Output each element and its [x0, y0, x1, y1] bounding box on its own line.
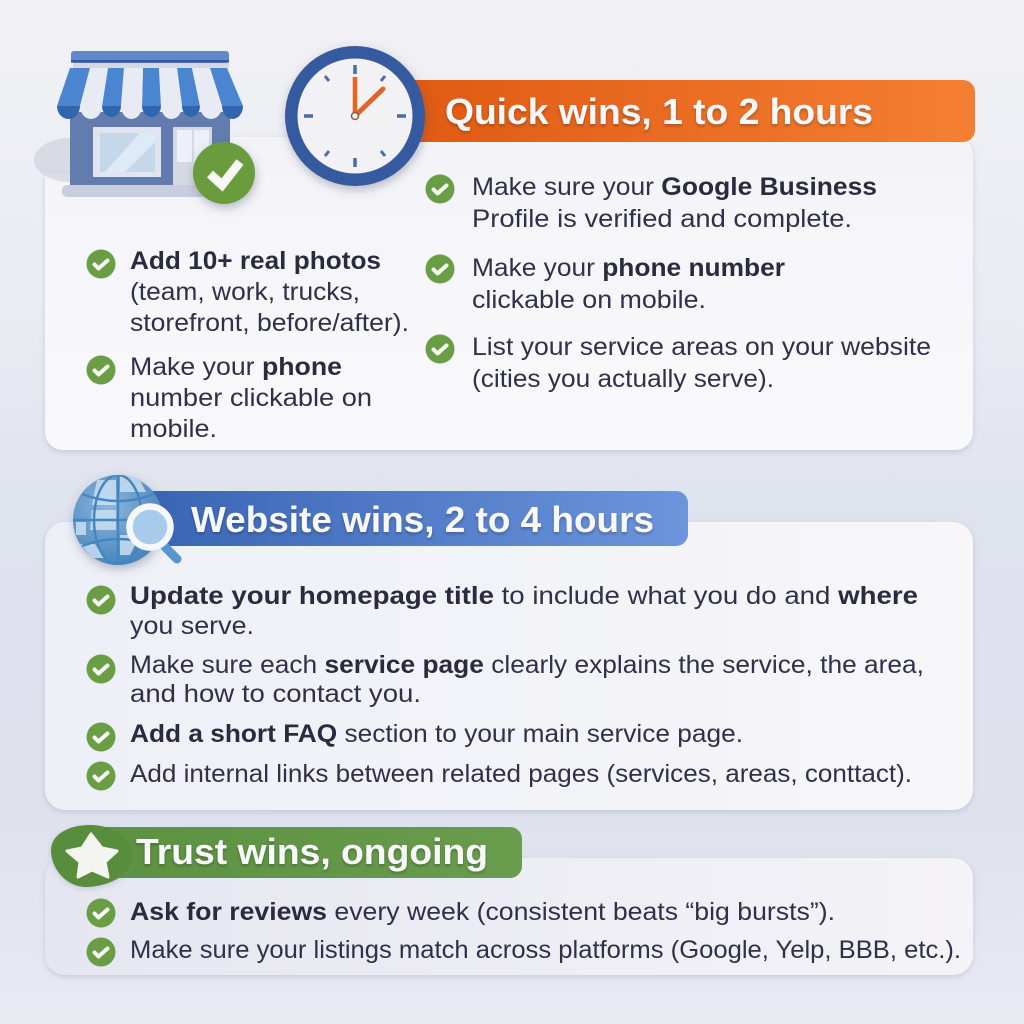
bullet: homepage title	[86, 582, 918, 640]
heading: quick wins: Quick wins, 1 to 2 hours	[445, 91, 873, 132]
bullet: service page	[86, 651, 924, 708]
heading: trust wins: Trust wins, ongoing	[136, 831, 488, 872]
heading: website wins: Website wins, 2 to 4 hours	[191, 499, 654, 540]
bullet: service page: and how to contact you.	[130, 680, 421, 708]
heading: website wins	[150, 491, 688, 546]
bullet: phone number right: clickable on mobile.	[472, 286, 706, 314]
icon: clock	[285, 46, 425, 186]
bullet: internal links: Add internal links between related pages (services, areas, conttact).	[130, 760, 912, 788]
heading: trust wins	[90, 827, 522, 878]
bullet: phone number right: Make your phone number	[472, 254, 785, 282]
panel: website wins card	[45, 522, 973, 810]
bullet: phone number left: number clickable on	[130, 384, 372, 412]
bullet: google business profile: Profile is verified and complete.	[472, 205, 852, 233]
bullet: homepage title: you serve.	[130, 612, 254, 640]
bullet: homepage title: Update your homepage title to include what you do and where	[130, 582, 918, 610]
bullet: phone number left	[86, 353, 372, 443]
bullet: service page: Make sure each service page clearly explains the service, the area,	[130, 651, 924, 679]
bullet: faq: Add a short FAQ section to your main service page.	[130, 720, 743, 748]
bullet: google business profile	[426, 173, 877, 233]
heading: quick wins	[400, 80, 975, 142]
bullet: phone number left: Make your phone	[130, 353, 342, 381]
bullet: service areas	[426, 333, 931, 393]
icon: star on green blob	[51, 825, 133, 887]
icon: globe with magnifier	[73, 475, 177, 565]
bullet: real photos: storefront, before/after).	[130, 309, 409, 337]
bullet: real photos: Add 10+ real photos	[130, 247, 381, 275]
bullet: google business profile: Make sure your Google Business	[472, 173, 877, 201]
bullet: reviews: Ask for reviews every week (consistent beats “big bursts”).	[130, 898, 835, 926]
bullet: phone number left: mobile.	[130, 415, 217, 443]
bullet: real photos: (team, work, trucks,	[130, 278, 360, 306]
bullet: service areas: (cities you actually serve).	[472, 365, 774, 393]
panel: trust wins card	[45, 858, 973, 975]
bullet: listings: Make sure your listings match across platforms (Google, Yelp, BBB, etc.).	[130, 936, 961, 964]
bullet: real photos	[86, 247, 409, 337]
bullet: service areas: List your service areas on your website	[472, 333, 931, 361]
bullet: phone number right	[426, 254, 785, 314]
panel: quick wins card	[45, 137, 973, 450]
icon: storefront with check badge	[34, 51, 255, 204]
